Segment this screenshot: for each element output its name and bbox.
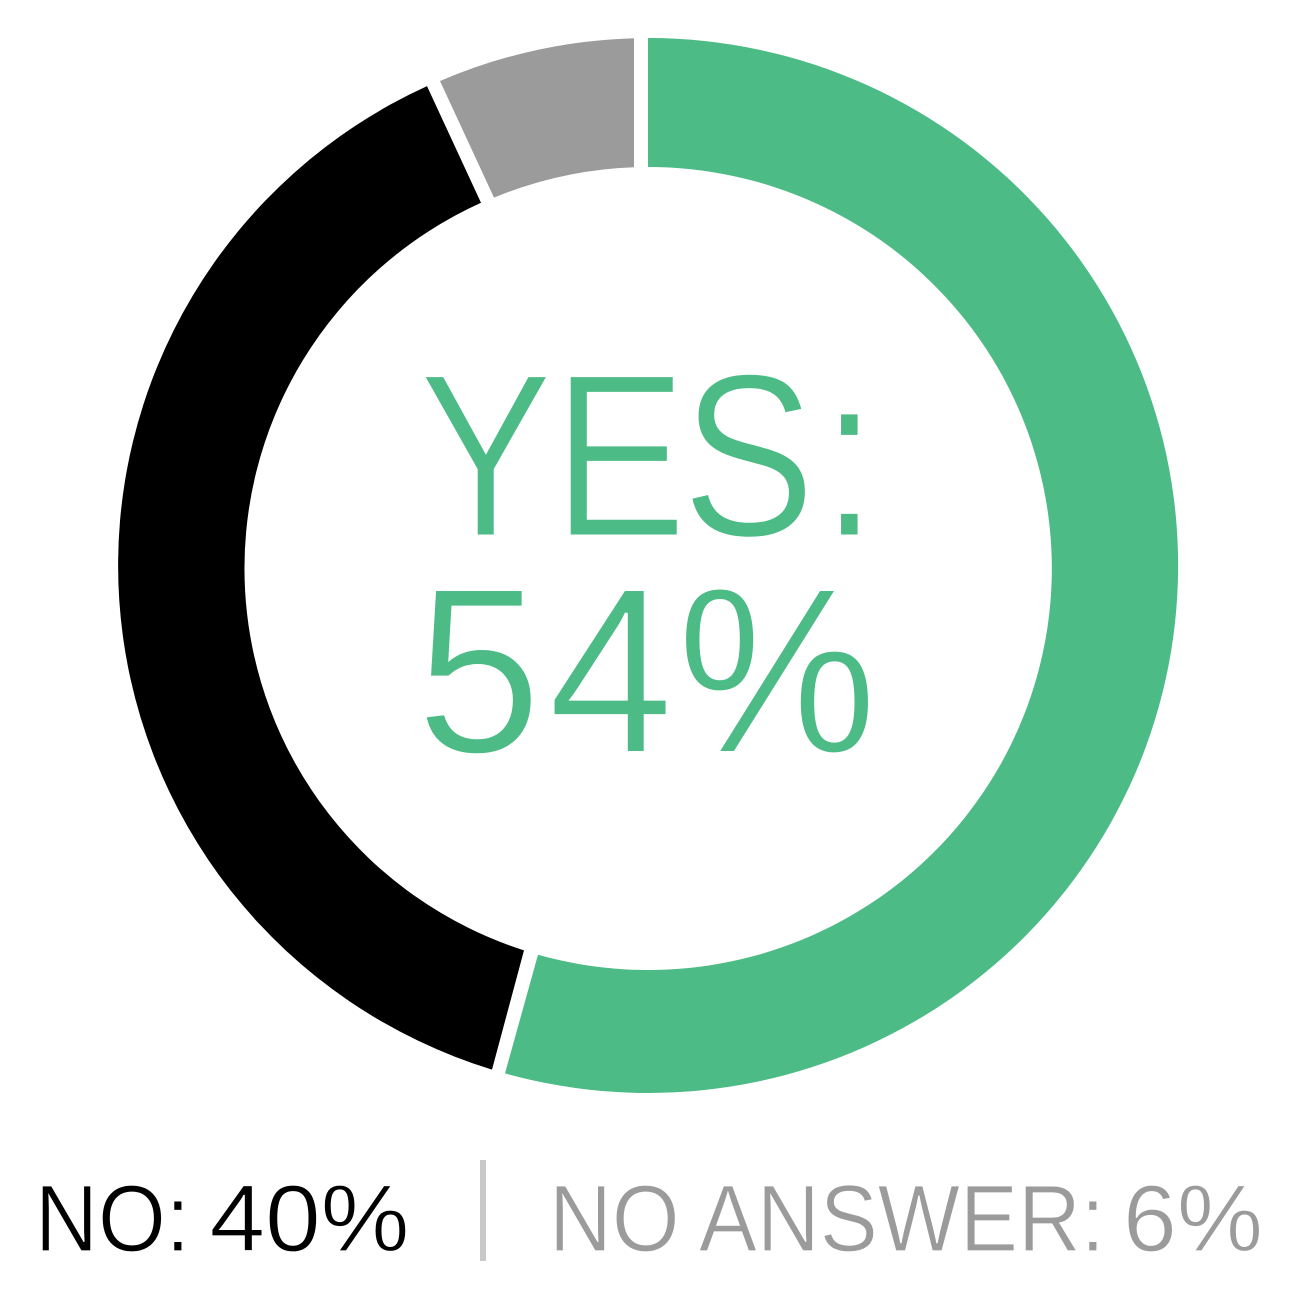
value: 54%: 54%	[416, 539, 877, 804]
segment: no 40%	[118, 86, 524, 1070]
legend: no answer 6%: NO ANSWER:	[549, 1166, 1105, 1272]
legend: no answer 6%: 6%	[1123, 1166, 1263, 1272]
donut chart	[118, 38, 1178, 1093]
legend: no 40%	[35, 1166, 410, 1272]
segment: yes 54%	[505, 38, 1178, 1093]
label: YES: YES:	[419, 326, 877, 586]
legend divider	[480, 1160, 486, 1261]
segment: no answer 6%	[440, 38, 634, 198]
legend: no 40%: NO:	[35, 1166, 190, 1272]
legend: no 40%: 40%	[210, 1166, 410, 1272]
center label: yes 54%	[416, 326, 877, 804]
